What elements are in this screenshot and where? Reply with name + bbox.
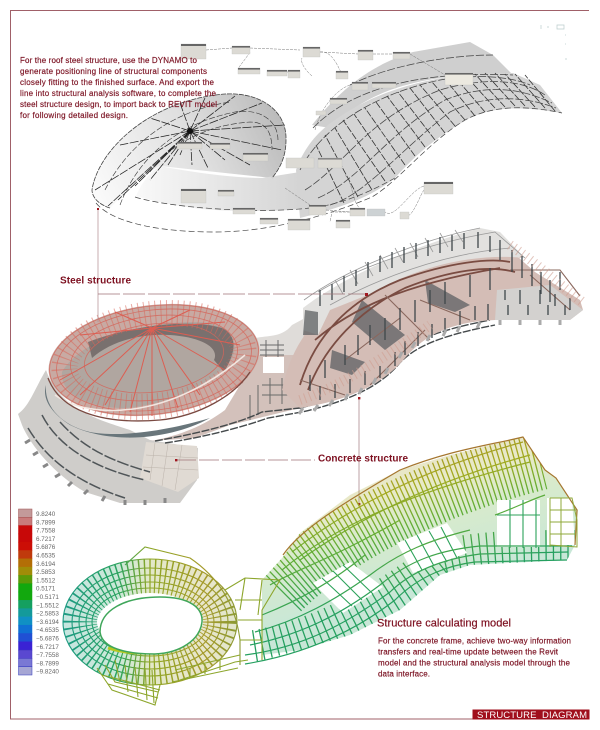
concrete outer piers <box>25 440 165 505</box>
wing voids <box>313 498 575 613</box>
wing longitudinal members <box>300 55 556 205</box>
legend values: 3.6194 <box>36 561 56 568</box>
wing right deck <box>495 285 583 320</box>
legend values <box>36 511 59 676</box>
ring tone fill <box>80 576 220 668</box>
wing main surface <box>296 73 562 218</box>
legend values: 4.6535 <box>36 552 56 560</box>
displacement legend <box>18 509 59 676</box>
legend values: −1.5512 <box>36 602 59 609</box>
marker dots <box>175 397 360 505</box>
plaza <box>140 442 199 492</box>
legend values: −8.7899 <box>36 660 59 667</box>
wing tone fill <box>262 437 578 655</box>
wing dense ribs <box>255 460 575 650</box>
void ribs <box>322 500 540 606</box>
legend values: −6.7217 <box>36 644 59 651</box>
wing transverse members <box>316 73 555 203</box>
dome dark rim <box>48 372 250 421</box>
band under dome <box>136 166 355 211</box>
ring inner hole edge <box>100 597 202 654</box>
roof description text: For the roof steel structure, use the DYNAMO to <box>20 56 198 65</box>
calculating model heading: Structure calculating model <box>377 618 511 630</box>
combined steel and concrete model <box>18 228 584 505</box>
walkway railing <box>155 320 495 443</box>
legend values: −3.6194 <box>36 619 59 626</box>
steel structure label: Steel structure <box>60 276 131 286</box>
dome hoops <box>105 102 278 205</box>
wing top grid <box>304 228 525 305</box>
link frames <box>250 340 290 420</box>
horizontal leader <box>176 459 315 461</box>
dome hoop steel <box>43 294 265 426</box>
connecting floor <box>150 325 385 441</box>
roof description text: steel structure design, to import back to REVIT model <box>20 100 217 109</box>
vertical leader <box>358 398 360 503</box>
Dynamo nodes <box>177 44 473 230</box>
apex <box>187 128 193 134</box>
legend values: 6.7217 <box>36 536 56 543</box>
roof description text: for following detailed design. <box>20 111 128 120</box>
wing beams <box>300 270 580 395</box>
concrete outer ring <box>18 370 198 503</box>
lower ribs <box>255 550 575 650</box>
vertical leader <box>97 210 99 322</box>
legend values: −5.6876 <box>36 636 59 642</box>
wing floor <box>282 238 583 408</box>
dome bowl shadow <box>88 324 234 372</box>
wing columns <box>310 232 570 400</box>
dome lower white rim <box>55 355 245 410</box>
wing longitudinals <box>245 442 572 664</box>
east edge footings <box>299 320 560 414</box>
dome ribs <box>95 96 285 206</box>
calculating model description: transfers and real-time update between the Revit <box>378 648 559 656</box>
wing steel arcs <box>300 261 515 390</box>
legend values: −7.7558 <box>36 652 59 659</box>
roof description text: line into structural analysis software, to complete the <box>20 89 217 98</box>
marker dots <box>97 208 368 296</box>
link opening <box>263 357 284 373</box>
calculating model description: data interface. <box>378 670 430 678</box>
legend values: 5.6876 <box>36 544 56 551</box>
plaza paving <box>143 443 198 490</box>
legend swatches <box>18 509 32 675</box>
lower dashed outline <box>96 108 562 232</box>
wing brown truss <box>283 437 577 555</box>
steel structure leader lines <box>97 208 368 322</box>
roof description text: generate positioning line of structural components <box>20 67 207 76</box>
upper ribs <box>280 460 540 590</box>
ring radial ribs <box>80 576 220 668</box>
ring shadow <box>45 385 210 438</box>
calculating model description: model and the structural analysis model through the <box>378 658 571 668</box>
banner background <box>472 710 590 720</box>
legend values: −4.6535 <box>36 627 59 634</box>
steel dome base <box>42 292 266 428</box>
legend values: 7.7558 <box>36 528 56 535</box>
wing right yellow panel <box>550 498 577 547</box>
legend values: 1.5512 <box>36 577 56 584</box>
legend values: −0.5171 <box>36 594 59 601</box>
dome radial steel band <box>59 303 249 417</box>
wing pink mesh <box>300 245 584 400</box>
concrete structure leader lines <box>175 397 360 505</box>
wing upper sheet <box>312 42 513 128</box>
concrete ring edge <box>28 415 150 498</box>
legend values: 9.8240 <box>36 511 56 518</box>
legend values: 0.5171 <box>36 586 56 593</box>
Dynamo wires <box>206 48 445 222</box>
dome surface <box>92 94 286 208</box>
dome outline <box>92 94 286 208</box>
ring south extension <box>97 578 280 705</box>
legend values: −2.5853 <box>36 611 59 618</box>
dome inner bowl <box>62 322 235 408</box>
wing voids <box>303 280 470 375</box>
horizontal leader <box>98 293 366 295</box>
banner title: STRUCTURE DIAGRAM <box>477 710 587 721</box>
roof description text: closely fitting to the finished surface. And export the <box>20 78 215 87</box>
legend values: −9.8240 <box>36 669 59 676</box>
dome spokes <box>60 310 240 416</box>
wing upper grey deck <box>303 228 525 335</box>
legend values: 8.7899 <box>36 519 56 526</box>
ring inner bright edge <box>108 640 190 653</box>
concrete structure label: Concrete structure <box>318 454 408 464</box>
roof surface model with Dynamo nodes <box>92 25 567 232</box>
structure calculating model <box>63 437 578 705</box>
view controls <box>541 25 567 59</box>
legend values: 2.5853 <box>36 569 56 576</box>
calculating model description: For the concrete frame, achieve two-way information <box>378 636 571 646</box>
structure diagram banner <box>472 710 590 721</box>
ring hoops <box>63 547 240 685</box>
link lobe <box>250 318 305 355</box>
